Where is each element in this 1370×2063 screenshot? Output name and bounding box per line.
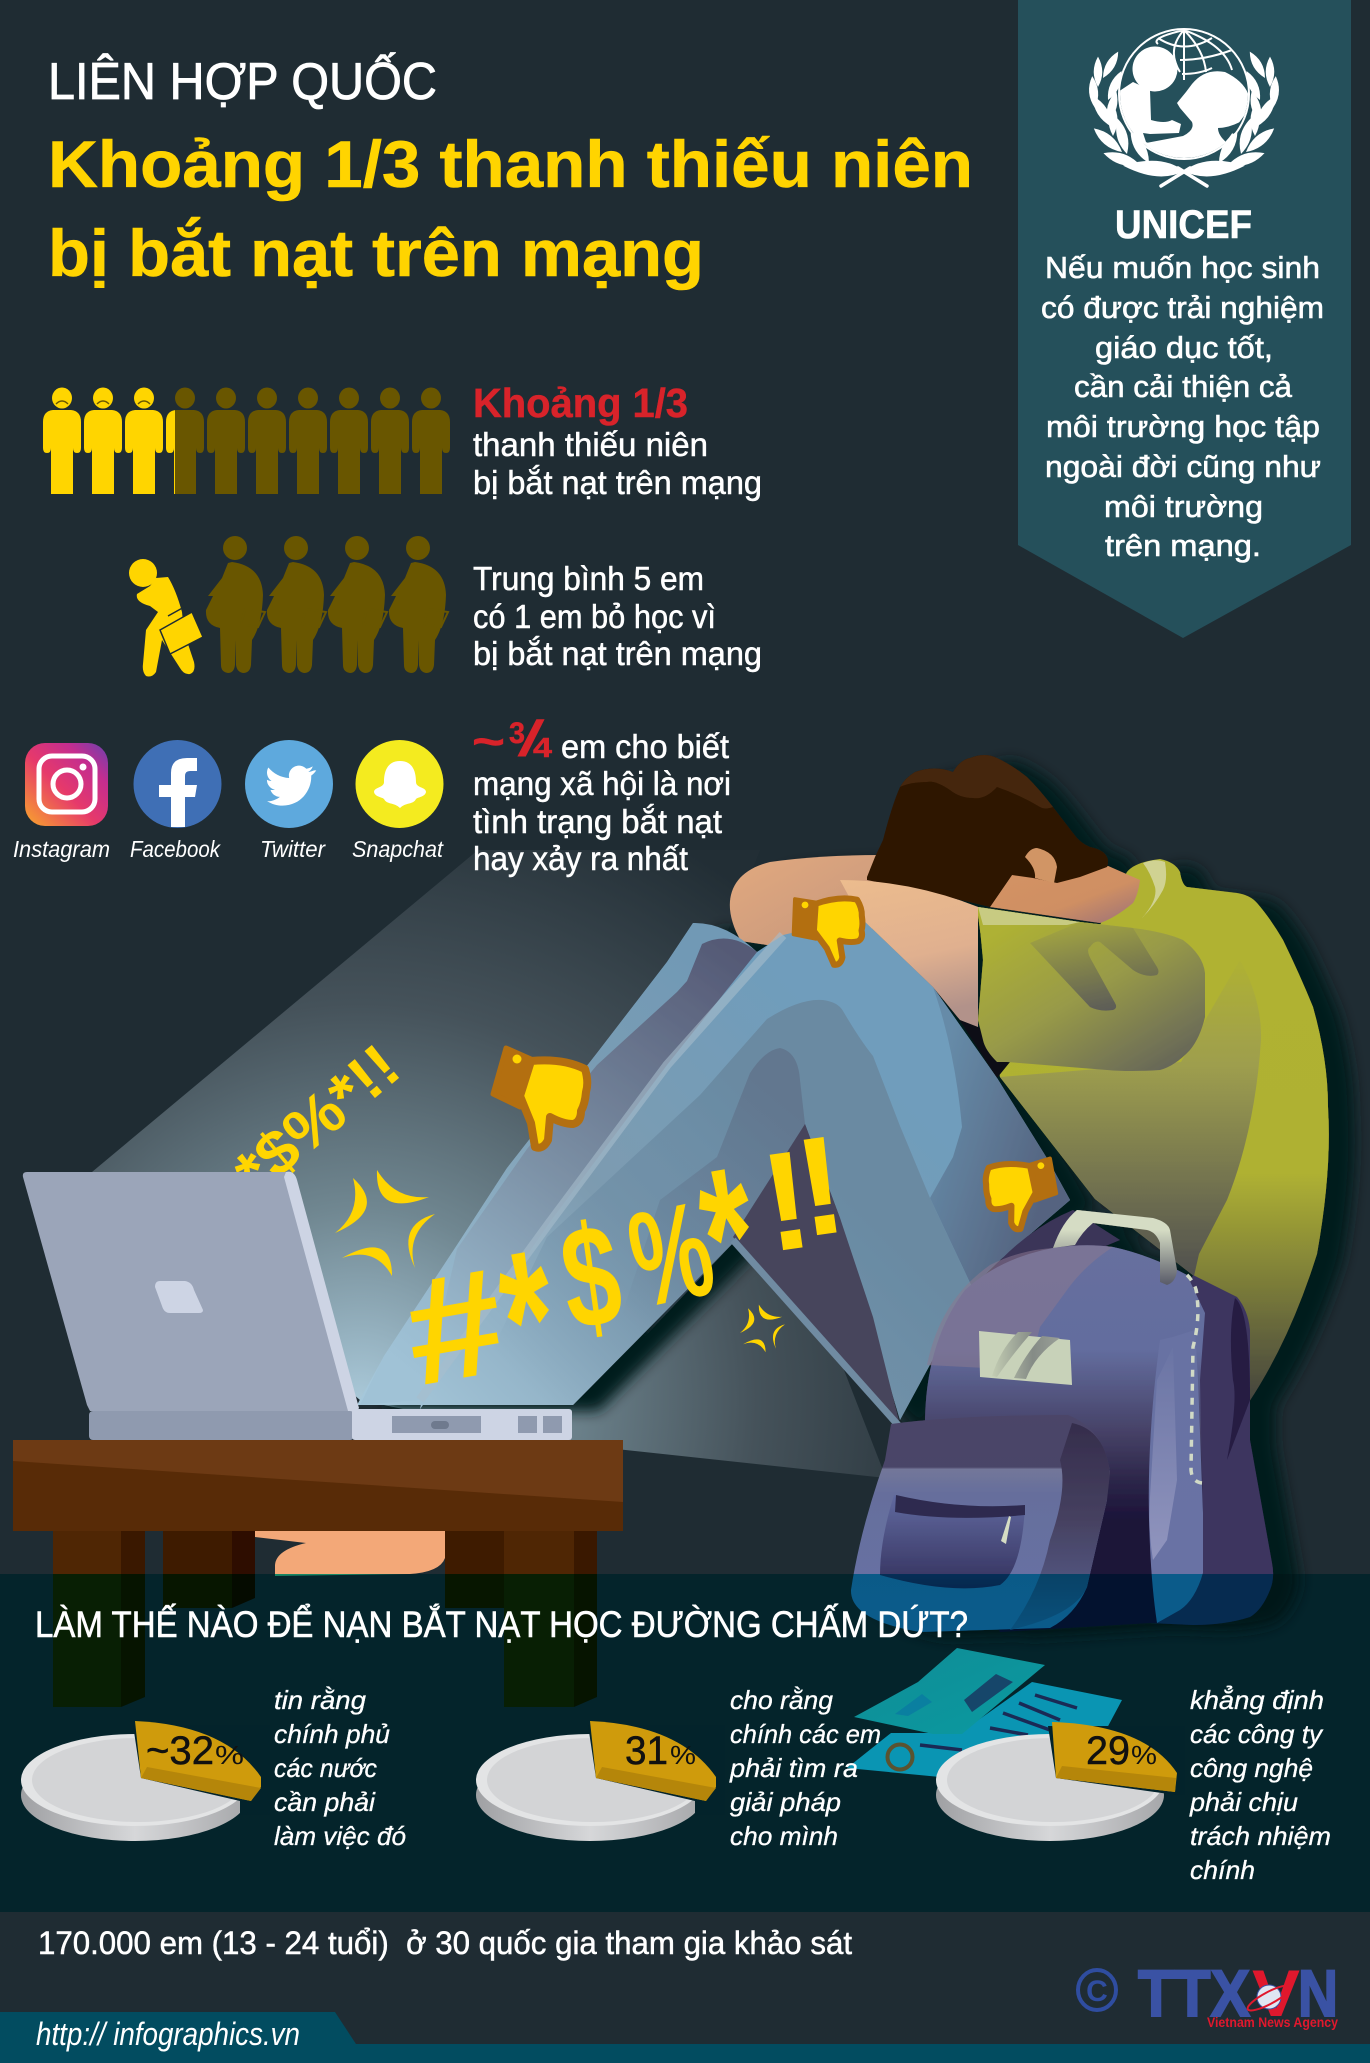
- icon: thumbs down near backpack: [981, 1152, 1060, 1233]
- pie 3 caption: [1189, 1685, 1331, 1885]
- backpack: [851, 1210, 1273, 1632]
- stat 3 text: tình trạng bắt nạt: [473, 803, 722, 840]
- heading line 2: bị bắt nạt trên mạng: [48, 216, 704, 290]
- icon labels: [13, 836, 444, 862]
- stat 1 text: thanh thiếu niên: [473, 426, 708, 463]
- large swear symbols: $: [552, 1192, 630, 1361]
- stat 3 text: ~: [472, 715, 505, 767]
- stat 3 text: /: [518, 711, 544, 767]
- icon labels: Twitter: [260, 836, 326, 862]
- chart: pie 32%: %: [215, 1740, 244, 1770]
- icon: thumbs down large: [493, 1048, 587, 1148]
- stat 2 text: Trung bình 5 em: [473, 560, 704, 597]
- chart: pie 32%: ~32: [146, 1729, 214, 1773]
- stat 2: student figures: [129, 536, 448, 676]
- icon labels: Instagram: [13, 836, 110, 862]
- dark inner leg: [733, 1124, 900, 1425]
- source note: 170.000 em (13 - 24 tuổi) ở 30 quốc gia tham gia khảo sát: [38, 1925, 852, 1961]
- icon: Snapchat: [356, 740, 444, 828]
- handle: [1053, 1210, 1177, 1285]
- right side of leg: [930, 987, 1070, 1287]
- icon: thumbs down on knee: [785, 884, 873, 973]
- UNICEF text: có được trải nghiệm: [1041, 290, 1324, 325]
- back panel: [987, 1210, 1120, 1290]
- gap between leg and arm: [958, 1018, 1010, 1078]
- shirt body: [977, 859, 1329, 1402]
- person with jeans and backpack: [357, 755, 1329, 1632]
- icon: bent yellow student with bag: [129, 559, 203, 676]
- stat 1: people row: [43, 388, 450, 494]
- stat 3 text: em cho biết: [561, 728, 729, 765]
- tag: [979, 1331, 1072, 1385]
- large swear symbols: [393, 1105, 854, 1432]
- section heading: LÀM THẾ NÀO ĐỂ NẠN BẮT NẠT HỌC ĐƯỜNG CHẤM DỨT?: [35, 1603, 968, 1645]
- laptop logo: [155, 1281, 203, 1313]
- upper arm: [840, 880, 978, 1027]
- laptop base: [89, 1411, 354, 1440]
- rear body: [1100, 1275, 1273, 1625]
- chart: pie 31%: [476, 1721, 725, 1841]
- pie 1 caption: tin rằng: [274, 1685, 367, 1715]
- logo: TTXVN: C: [1086, 1975, 1108, 2008]
- pie 3 caption: các công ty: [1190, 1719, 1324, 1749]
- hair and face: [867, 755, 1140, 923]
- logo: TTXVN: TTX: [1138, 1956, 1250, 2030]
- light beam from laptop: [92, 850, 886, 1478]
- collar highlight: [1142, 860, 1166, 918]
- stat 3 text: [472, 711, 731, 877]
- pie 2 caption: [729, 1685, 881, 1851]
- pie 3 caption: chính: [1190, 1855, 1255, 1885]
- stitches: [1187, 1275, 1202, 1483]
- chart: pie 29%: 29: [1086, 1729, 1130, 1773]
- chart: pie 31%: %: [670, 1740, 696, 1770]
- logo: TTXVN: [1078, 1956, 1338, 2030]
- UNICEF text: cần cải thiện cả: [1074, 369, 1293, 404]
- pie 1 caption: làm việc đó: [274, 1821, 406, 1851]
- title: [48, 52, 973, 290]
- laptop lid: [23, 1172, 353, 1411]
- table top: [13, 1440, 623, 1531]
- large swear symbols: *: [686, 1125, 774, 1349]
- large swear symbols: #: [393, 1237, 516, 1418]
- large swear symbols: %: [617, 1173, 726, 1337]
- wreath: [1088, 50, 1280, 186]
- icon: UNICEF emblem: [1088, 29, 1280, 186]
- pie 3 caption: phải chịu: [1189, 1787, 1298, 1817]
- light strip: [420, 935, 783, 1400]
- logo: TTXVN: N: [1298, 1956, 1338, 2030]
- icon labels: Snapchat: [352, 836, 444, 862]
- table legs: [53, 1531, 597, 1707]
- back arm: [730, 855, 900, 950]
- back leg: [360, 923, 757, 1405]
- pie 3 caption: khẳng định: [1190, 1685, 1324, 1715]
- papers on floor: [847, 1648, 1122, 1777]
- sleeve: [978, 907, 1205, 1071]
- pie 1 caption: [274, 1685, 406, 1851]
- pie 2 caption: chính các em: [730, 1719, 881, 1749]
- stat 1 text: bị bắt nạt trên mạng: [473, 464, 762, 501]
- pie 1 caption: chính phủ: [274, 1719, 390, 1749]
- table: [13, 1440, 623, 1707]
- laptop: [23, 1172, 572, 1440]
- stat 3 text: hay xảy ra nhất: [473, 840, 688, 877]
- pink highlight: [927, 1245, 1113, 1370]
- social media icons: [13, 740, 444, 862]
- UNICEF text: giáo dục tốt,: [1095, 330, 1273, 365]
- front pocket: [851, 1415, 1110, 1632]
- UNICEF text: ngoài đời cũng như: [1045, 449, 1321, 484]
- large swear symbols: *: [486, 1208, 574, 1432]
- pie 2 caption: phải tìm ra: [729, 1753, 858, 1783]
- pie 3 caption: trách nhiệm: [1190, 1821, 1331, 1851]
- main body: [925, 1245, 1205, 1632]
- UNICEF text: UNICEF: [1115, 203, 1252, 247]
- UNICEF text: trên mạng.: [1105, 528, 1261, 563]
- small swear symbols: *$%*!!: [222, 1031, 413, 1208]
- UNICEF text: [1041, 203, 1324, 563]
- stat 2 text: [473, 560, 762, 672]
- icon: Instagram: [25, 743, 108, 826]
- pie 2 caption: cho rằng: [730, 1685, 834, 1715]
- side strip: [1149, 1330, 1203, 1623]
- stat 2 text: bị bắt nạt trên mạng: [473, 635, 762, 672]
- large swear symbols: !: [786, 1105, 854, 1267]
- stat 3 text: 4: [533, 732, 553, 763]
- icon: angry mark small: [740, 1305, 785, 1352]
- inner fold: [590, 1048, 805, 1395]
- footer bar: [0, 2012, 1370, 2063]
- large swear symbols: !: [752, 1120, 820, 1282]
- logo: TTXVN: Vietnam News Agency: [1207, 2014, 1338, 2030]
- UNICEF text: môi trường: [1104, 489, 1263, 524]
- heading line 1: Khoảng 1/3 thanh thiếu niên: [48, 127, 973, 201]
- pie 3 caption: công nghệ: [1190, 1753, 1313, 1783]
- UNICEF text: Nếu muốn học sinh: [1045, 250, 1320, 285]
- stat 3 text: 3: [509, 717, 525, 750]
- UNICEF text: môi trường học tập: [1046, 409, 1320, 444]
- pie 2 caption: giải pháp: [730, 1787, 841, 1817]
- ear: [1025, 848, 1057, 883]
- chart: pie 29%: %: [1131, 1740, 1157, 1770]
- foot under table: [255, 1531, 445, 1576]
- icon: Facebook: [134, 740, 222, 828]
- chart: pie 32%: [21, 1721, 270, 1841]
- heading: Liên Hợp Quốc: LIÊN HỢP QUỐC: [48, 52, 437, 111]
- icon labels: Facebook: [130, 836, 221, 862]
- icon: Twitter: [245, 740, 333, 828]
- pie 1 caption: các nước: [274, 1753, 377, 1783]
- stat 2 text: có 1 em bỏ học vì: [473, 598, 716, 635]
- icon: angry mark large: [335, 1170, 435, 1276]
- jeans: [357, 917, 1070, 1425]
- stat 1 text: [473, 380, 762, 501]
- logo: TTXVN: V: [1252, 1956, 1300, 2030]
- stat 1 text: Khoảng 1/3: [473, 380, 688, 426]
- panel: how to stop bullying: [0, 1574, 1370, 1912]
- chart: pie 29%: [936, 1722, 1185, 1841]
- panel: UNICEF: [1018, 0, 1351, 638]
- stat 3 text: mạng xã hội là nơi: [473, 765, 731, 802]
- outer fold: [470, 1000, 972, 1420]
- chart: pie 31%: 31: [625, 1729, 668, 1773]
- pie 2 caption: cho mình: [730, 1821, 838, 1851]
- pie 1 caption: cần phải: [274, 1787, 376, 1817]
- website url: http:// infographics.vn: [36, 2016, 300, 2052]
